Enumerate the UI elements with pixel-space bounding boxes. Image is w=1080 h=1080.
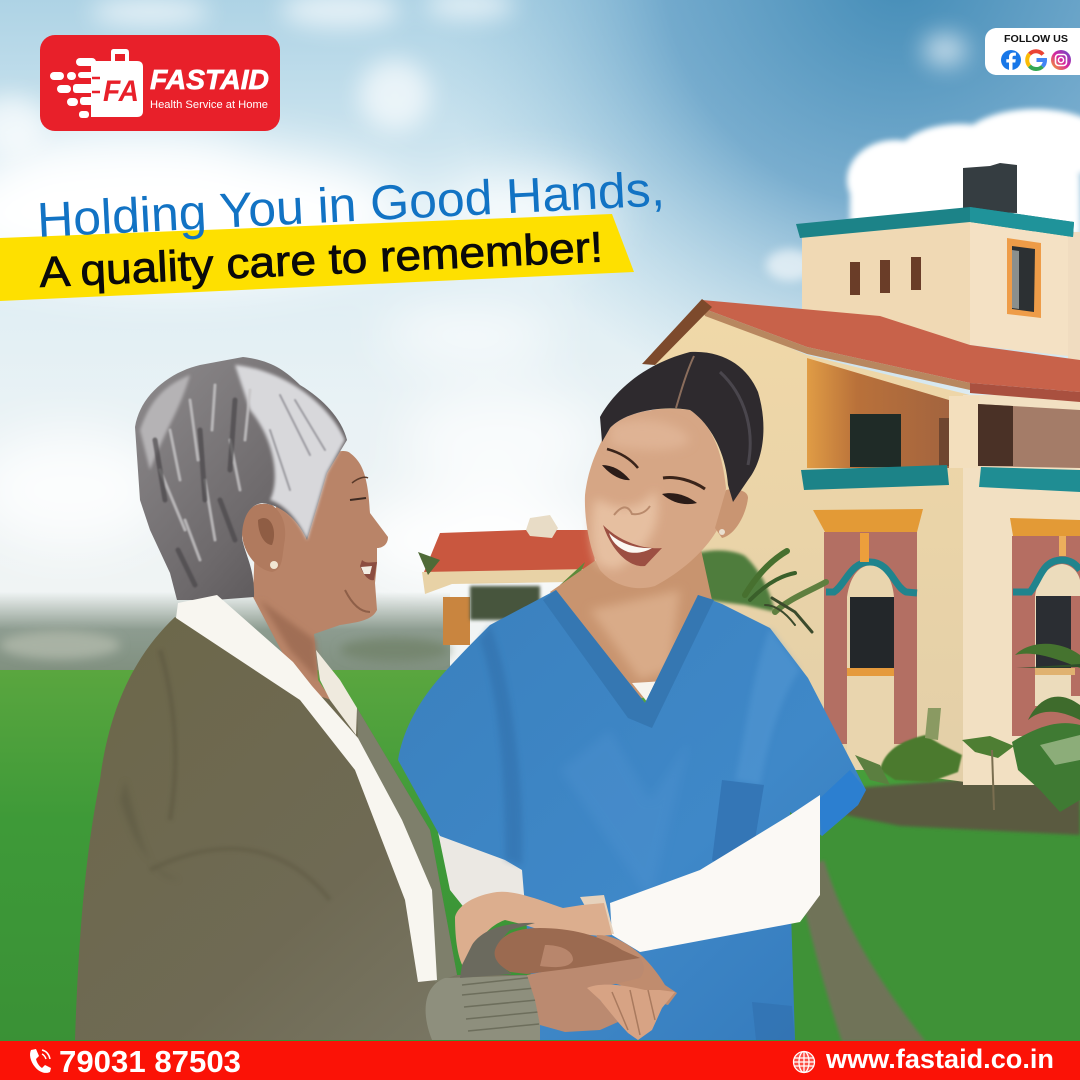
headline	[0, 162, 666, 301]
website: www.fastaid.co.in	[825, 1044, 1054, 1074]
shrubs by the house	[855, 644, 1080, 812]
icon monogram: FA	[103, 75, 139, 108]
garden path	[797, 860, 926, 1042]
clasped hands	[455, 892, 677, 1040]
follow us badge	[985, 28, 1080, 75]
woman cardigan	[75, 617, 540, 1040]
nurse left white sleeve	[438, 832, 532, 915]
balcony rails	[801, 465, 949, 490]
house tower	[796, 207, 1080, 360]
icon: google	[1027, 51, 1045, 69]
upper balcony recess	[807, 358, 949, 468]
scrub collar band	[543, 590, 714, 728]
older woman	[75, 357, 540, 1040]
yellow ribbon	[0, 214, 634, 301]
nurse lower fingers	[587, 985, 675, 1040]
nurse wrapping hand	[585, 935, 677, 1005]
large white cloud	[847, 109, 1080, 235]
palm behind nurse	[684, 550, 826, 632]
logo badge	[40, 35, 280, 131]
headline line two: A quality care to remember!	[38, 223, 604, 297]
tagline: Health Service at Home	[150, 99, 268, 111]
brand name: FASTAID	[150, 64, 269, 95]
nurse	[398, 352, 866, 1040]
phone number: 79031 87503	[59, 1044, 241, 1079]
nurse undershirt neckline	[632, 680, 682, 713]
icon: instagram	[1051, 50, 1071, 70]
woman hair	[135, 357, 347, 600]
knit cuff wrist	[460, 923, 535, 978]
house	[642, 163, 1080, 785]
arched window right	[1010, 518, 1080, 736]
icon: medical bag	[50, 49, 143, 118]
footer bar	[0, 1041, 1080, 1080]
nurse wristwatch	[580, 895, 614, 934]
roof	[642, 299, 1080, 402]
main wall	[655, 310, 1080, 782]
follow us label: FOLLOW US	[1004, 34, 1068, 45]
nurse hand on top	[455, 892, 612, 972]
nurse hair	[600, 352, 763, 502]
small background building	[418, 515, 596, 645]
neck highlight	[590, 590, 680, 680]
arched window left	[813, 509, 923, 770]
woman white shirt	[176, 595, 437, 982]
nurse neck	[550, 545, 712, 700]
nurse scrubs	[398, 590, 866, 1040]
distant tree line	[0, 592, 450, 675]
nurse right white sleeve	[610, 795, 820, 952]
icon: facebook	[1001, 50, 1021, 70]
icon: phone	[30, 1049, 51, 1073]
sky background	[0, 0, 1080, 680]
nurse face	[585, 409, 748, 588]
woman's upper hand and thumb	[495, 928, 640, 974]
woman's lower hand	[527, 957, 644, 1032]
headline line one: Holding You in Good Hands,	[36, 162, 666, 248]
woman neck and face	[253, 451, 388, 705]
woman ear with earring	[242, 504, 285, 572]
icon: globe	[794, 1052, 814, 1072]
green lawn	[0, 670, 1080, 1045]
water tank	[963, 163, 1017, 213]
